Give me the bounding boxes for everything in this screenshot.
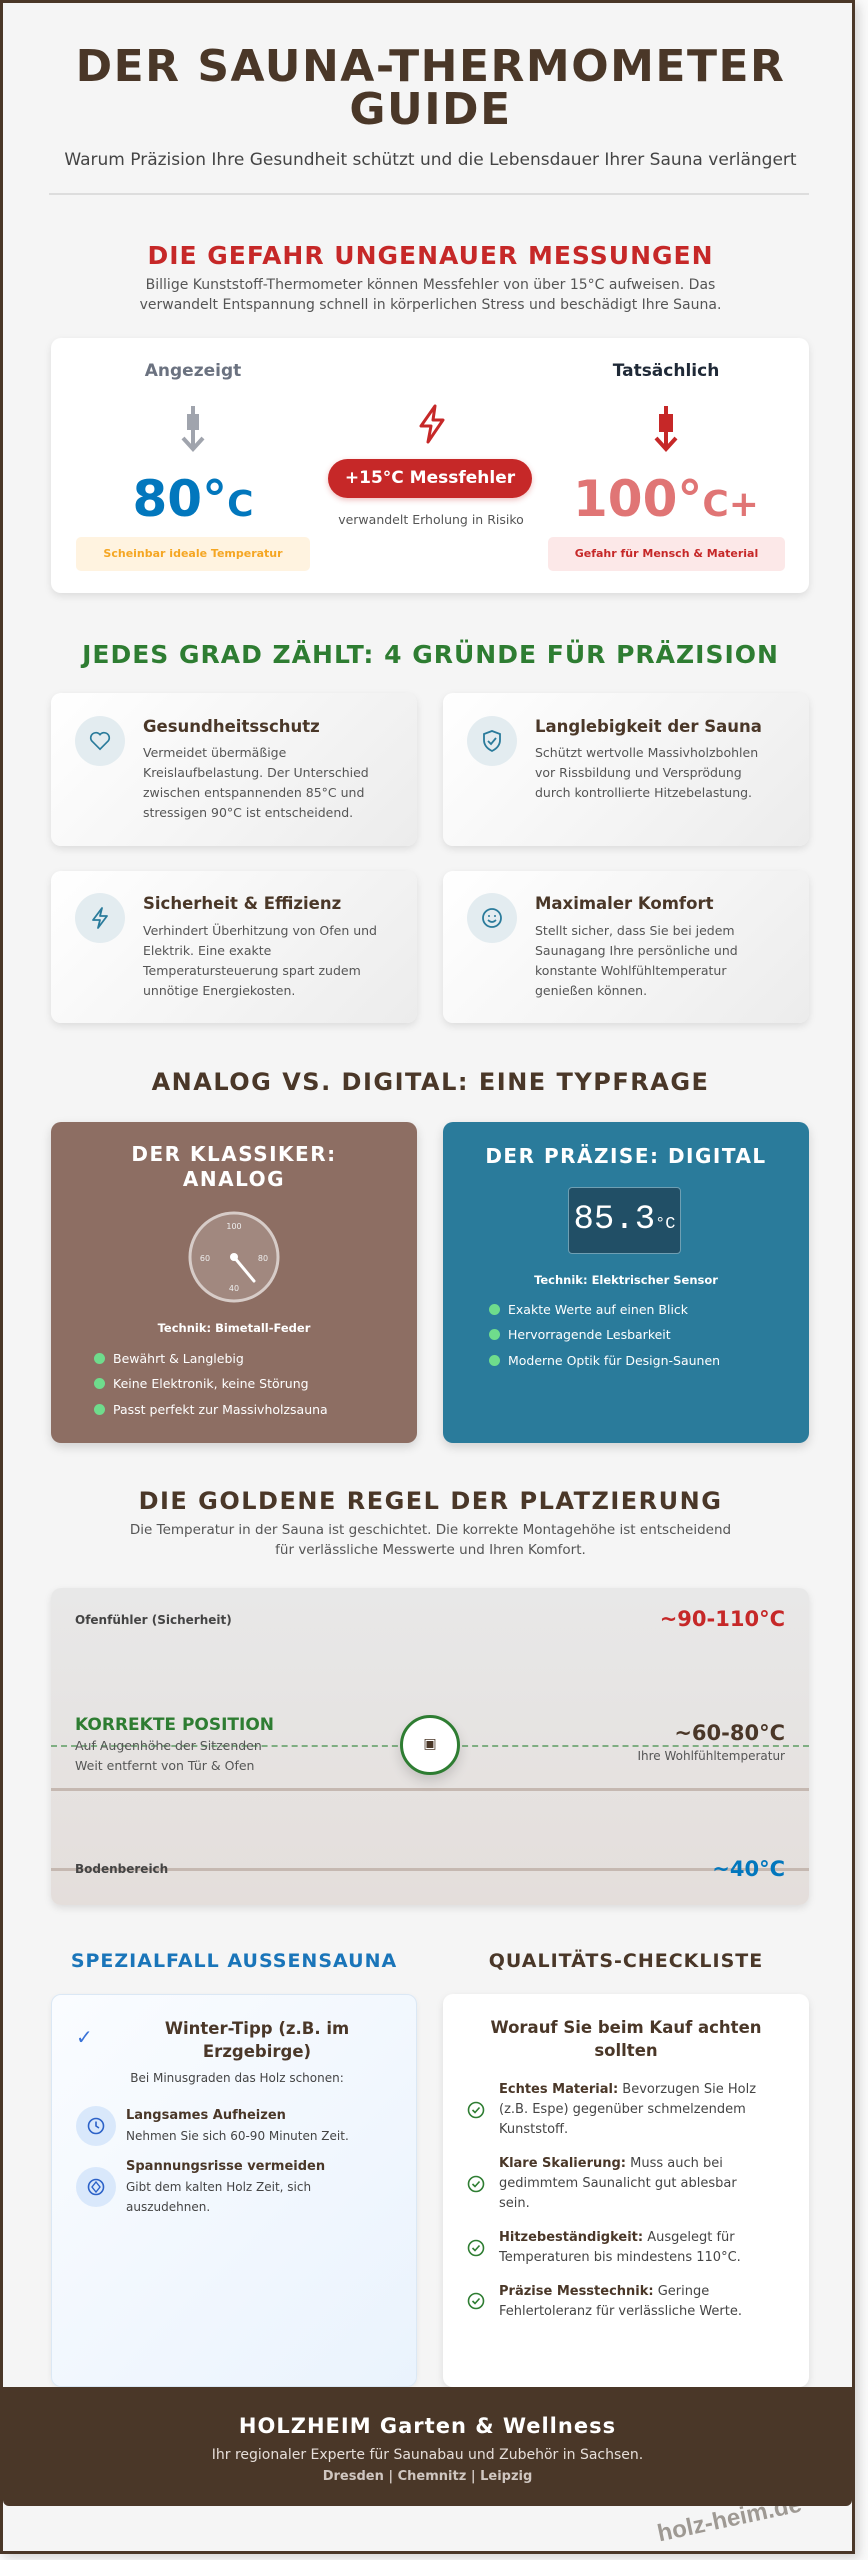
text: danger intro: verwandelt Entspannung schnell in körperlichen Stress und beschädigt Ihre Sauna. (140, 297, 721, 313)
panel: checklist: Worauf Sie beim Kauf achten (490, 2018, 762, 2037)
panel: placement diagram: ~60-80°C (674, 1721, 785, 1745)
panel: checklist (443, 1994, 809, 2387)
icon: lightning (419, 404, 445, 444)
footer: Dresden | Chemnitz | Leipzig (323, 2469, 532, 2484)
panel: sicherheit: Temperatursteuerung spart zudem (143, 963, 361, 978)
heading: aussensauna: SPEZIALFALL AUSSENSAUNA (71, 1950, 397, 1972)
panel: placement diagram (51, 1588, 809, 1905)
panel: comparison (51, 338, 809, 593)
heading: platzierung: DIE GOLDENE REGEL DER PLATZIERUNG (139, 1487, 722, 1515)
panel: analog: Keine Elektronik, keine Störung (113, 1376, 309, 1391)
panel: komfort: Stellt sicher, dass Sie bei jedem (535, 923, 735, 938)
badge yellow: Scheinbar ideale Temperatur (103, 547, 283, 560)
panel: placement diagram: Ofenfühler (Sicherheit) (75, 1613, 232, 1627)
icon: heart (75, 716, 125, 766)
panel: digital (443, 1122, 809, 1443)
text: danger intro: Billige Kunststoff-Thermometer können Messfehler von über 15°C aufweisen. Das (146, 277, 715, 293)
panel: analog: Bewährt & Langlebig (113, 1351, 244, 1366)
heading: danger: DIE GEFAHR UNGENAUER MESSUNGEN (147, 241, 714, 270)
panel: analog (51, 1122, 417, 1443)
panel: komfort: konstante Wohlfühltemperatur (535, 963, 726, 978)
panel: sicherheit: Elektrik. Eine exakte (143, 943, 271, 958)
footer: Ihr regionaler Experte für Saunabau und Zubehör in Sachsen. (212, 2447, 643, 2463)
heading: gründe: JEDES GRAD ZÄHLT: 4 GRÜNDE FÜR PRÄZISION (82, 640, 779, 669)
heading: checkliste: QUALITÄTS-CHECKLISTE (489, 1950, 763, 1972)
icon: gauge (188, 1212, 280, 1302)
checklist items: Klare Skalierung: Muss auch bei (499, 2156, 723, 2171)
checklist items: (z.B. Espe) gegenüber schmelzendem (499, 2102, 746, 2117)
panel: digital: Technik: Elektrischer Sensor (534, 1273, 718, 1287)
checklist items: Hitzebeständigkeit: Ausgelegt für (499, 2230, 735, 2245)
title: DER SAUNA-THERMOMETER (76, 41, 785, 92)
icon: thermometer marker: ▣ (423, 1736, 437, 1752)
panel: gesundheit: Gesundheitsschutz (143, 717, 320, 736)
checklist items: Fehlertoleranz für verlässliche Werte. (499, 2304, 742, 2319)
panel: winter tip: Nehmen Sie sich 60-90 Minuten Zeit. (126, 2129, 349, 2143)
footer (3, 2387, 852, 2506)
checklist items: sein. (499, 2196, 530, 2211)
checklist items: Präzise Messtechnik: Geringe (499, 2284, 709, 2299)
panel: placement diagram: Ihre Wohlfühltemperatur (637, 1749, 785, 1763)
value 100: 100°C+ (573, 470, 759, 528)
panel: langlebigkeit: Langlebigkeit der Sauna (535, 717, 762, 736)
text: platzierung intro: Die Temperatur in der Sauna ist geschichtet. Die korrekte Montagehöhe ist entscheidend (130, 1522, 731, 1538)
title (76, 41, 785, 135)
panel: komfort: genießen können. (535, 983, 647, 998)
panel: sicherheit: Verhindert Überhitzung von Ofen und (143, 923, 377, 938)
panel: komfort: Saunagang Ihre persönliche und (535, 943, 738, 958)
icon: gauge: 60 (200, 1254, 210, 1263)
panel: analog: ANALOG (183, 1167, 285, 1191)
panel: gesundheit (51, 693, 417, 846)
checklist items (468, 2082, 756, 2319)
icon: thermometer grey (182, 406, 204, 452)
panel: sicherheit: Sicherheit & Effizienz (143, 894, 341, 913)
panel: winter tip: auszudehnen. (126, 2200, 210, 2214)
panel: analog: DER KLASSIKER: (131, 1142, 337, 1166)
icon: smile (467, 893, 517, 943)
panel: winter tip: Gibt dem kalten Holz Zeit, sich (126, 2180, 311, 2194)
panel: winter tip (51, 1994, 417, 2387)
text: risiko: verwandelt Erholung in Risiko (338, 512, 524, 527)
panel: analog: Passt perfekt zur Massivholzsauna (113, 1402, 328, 1417)
icon: clock (76, 2106, 116, 2146)
panel: komfort (443, 871, 809, 1023)
panel: langlebigkeit: durch kontrollierte Hitzebelastung. (535, 785, 752, 800)
label: angezeigt: Angezeigt (145, 361, 241, 381)
panel: gesundheit: stressigen 90°C ist entscheidend. (143, 805, 353, 820)
heading: analog vs digital: ANALOG VS. DIGITAL: EINE TYPFRAGE (152, 1068, 709, 1096)
icon: thermometer red (654, 406, 678, 452)
checklist items: Kunststoff. (499, 2122, 568, 2137)
icon: gauge: 40 (229, 1284, 239, 1293)
panel: digital: Exakte Werte auf einen Blick (508, 1302, 688, 1317)
icon: shield (467, 716, 517, 766)
icon: crack (76, 2167, 116, 2207)
checklist items: gedimmtem Saunalicht gut ablesbar (499, 2176, 737, 2191)
panel: placement diagram: Bodenbereich (75, 1862, 168, 1876)
panel: langlebigkeit: vor Rissbildung und Versprödung (535, 765, 742, 780)
text: platzierung intro: für verlässliche Messwerte und Ihren Komfort. (275, 1542, 586, 1558)
icon: gauge: 100 (226, 1222, 242, 1231)
icon: bolt (75, 893, 125, 943)
panel: placement diagram: KORREKTE POSITION (75, 1715, 274, 1735)
badge red: Gefahr für Mensch & Material (575, 547, 758, 560)
panel: checklist: sollten (594, 2041, 658, 2060)
panel: placement diagram: Auf Augenhöhe der Sitzenden (75, 1738, 262, 1753)
panel: gesundheit: Kreislaufbelastung. Der Unterschied (143, 765, 369, 780)
value 80: 80°C (132, 470, 254, 528)
display: 85.3 (568, 1187, 681, 1254)
panel: placement diagram: Weit entfernt von Tür & Ofen (75, 1758, 254, 1773)
watermark: holz-heim.de (655, 2491, 804, 2547)
icon: check: ✓ (76, 2025, 93, 2049)
text: platzierung intro (130, 1522, 731, 1558)
panel: winter tip: Erzgebirge) (203, 2042, 311, 2061)
text: danger intro (140, 277, 721, 313)
panel: placement diagram: ~90-110°C (660, 1607, 785, 1631)
icon: thermometer marker (400, 1715, 460, 1775)
panel: placement diagram: ~40°C (712, 1857, 785, 1881)
panel: winter tip: Winter-Tipp (z.B. im (165, 2019, 349, 2038)
title: GUIDE (349, 84, 512, 135)
panel: winter tip: Spannungsrisse vermeiden (126, 2159, 325, 2174)
checklist items: Echtes Material: Bevorzugen Sie Holz (499, 2082, 756, 2097)
pill: error (328, 459, 532, 498)
panel: sicherheit: unnötige Energiekosten. (143, 983, 295, 998)
panel: gesundheit: Vermeidet übermäßige (143, 745, 286, 760)
panel: analog: Technik: Bimetall-Feder (158, 1321, 310, 1335)
panel: digital: DER PRÄZISE: DIGITAL (485, 1144, 767, 1168)
panel: gesundheit: zwischen entspannenden 85°C und (143, 785, 364, 800)
panel: digital: Moderne Optik für Design-Saunen (508, 1353, 720, 1368)
subtitle: Warum Präzision Ihre Gesundheit schützt und die Lebensdauer Ihrer Sauna verlängert (64, 150, 797, 170)
badge yellow (76, 537, 310, 571)
panel: winter tip: Langsames Aufheizen (126, 2108, 286, 2123)
panel: langlebigkeit: Schützt wertvolle Massivholzbohlen (535, 745, 758, 760)
pill: error: +15°C Messfehler (345, 468, 515, 488)
icon: gauge: 80 (258, 1254, 268, 1263)
panel: winter tip: Bei Minusgraden das Holz schonen: (130, 2071, 344, 2085)
footer: HOLZHEIM Garten & Wellness (239, 2414, 616, 2438)
display: 85.3: 85.3°C (573, 1201, 676, 1239)
panel: sicherheit (51, 871, 417, 1023)
panel: langlebigkeit (443, 693, 809, 846)
panel: digital: Hervorragende Lesbarkeit (508, 1327, 671, 1342)
panel: komfort: Maximaler Komfort (535, 894, 713, 913)
checklist items: Temperaturen bis mindestens 110°C. (499, 2250, 741, 2265)
badge red (548, 537, 785, 571)
label: tatsächlich: Tatsächlich (613, 361, 719, 381)
